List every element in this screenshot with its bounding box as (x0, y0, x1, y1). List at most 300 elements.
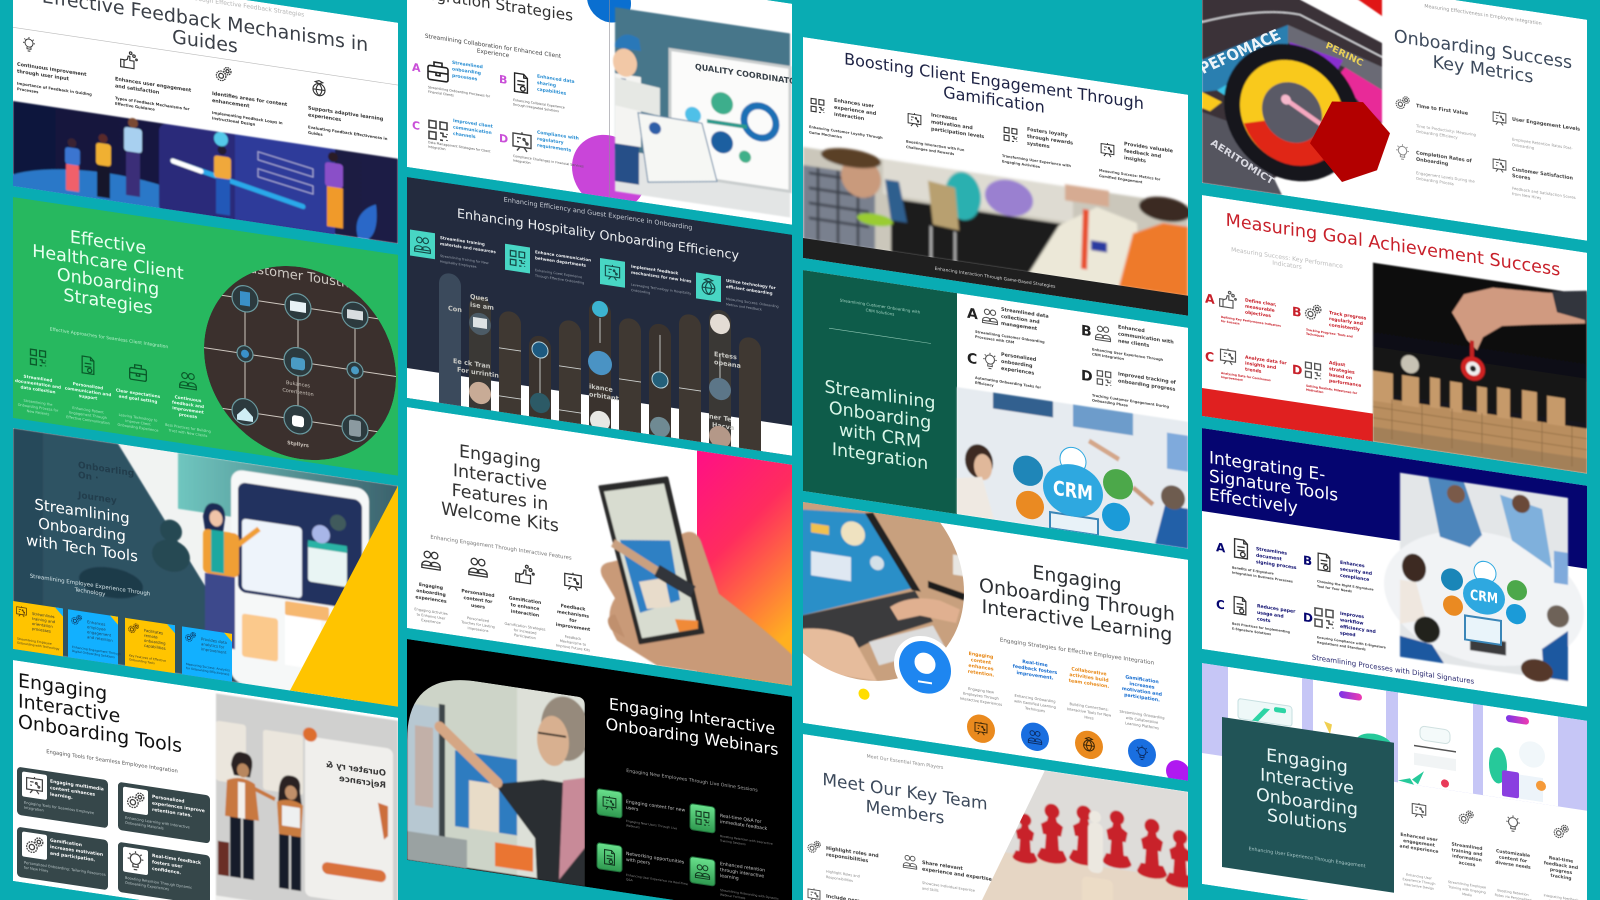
feature list: experiences (308, 112, 341, 123)
feature list: Engaging content for new (626, 799, 685, 814)
A B C D list: performance (1329, 378, 1361, 389)
feature cards: remote (144, 633, 158, 640)
feature list: insights (1124, 155, 1146, 164)
A B C D list: C (1205, 349, 1214, 365)
feature list: interaction (511, 609, 539, 619)
feature list: Streamline training (440, 235, 485, 247)
A B C D list: Improved client (453, 118, 494, 130)
feature list: Metrics and Feedback (726, 302, 762, 312)
strategy columns: Engaging (969, 651, 993, 661)
image: hand placing target on wooden blocks (1373, 259, 1587, 474)
feature cards: for Onboarding Effectiveness (186, 666, 230, 677)
A B C D list: C (1216, 597, 1225, 612)
strategy columns: Employees Through (963, 692, 999, 701)
feature list: Enhancing Customer Loyalty Through (809, 125, 883, 140)
feature list: Engagement Through (69, 410, 107, 420)
heading: Healthcare Client (32, 242, 184, 284)
A B C D list: Enhancing Collateral Experience (513, 98, 565, 110)
feature list: improvement (172, 405, 204, 415)
striped pillars: ner Te (709, 412, 732, 424)
A B C D list: Tracking Customer Engagement During (1092, 393, 1170, 409)
feature list: onboarding (416, 588, 446, 598)
feature list: Transforming User Experience with (1002, 154, 1071, 168)
A B C D list: A (1216, 540, 1226, 556)
feature cards: fosters user (152, 859, 183, 870)
feature cards: Onboarding Experiences (125, 881, 169, 891)
feature list: Enhancing User Experience via Real-Time (626, 873, 688, 886)
A B C D list: efficiency and (1340, 624, 1376, 635)
A B C D list: strategies (1329, 366, 1355, 376)
feature cards: Measuring Success: Analytics (186, 662, 230, 673)
strategy columns: Techniques (1024, 706, 1045, 713)
metrics list: Time to Productivity: Measuring (1415, 123, 1476, 137)
panel: Boosting Client Engagement Through Gamification (803, 37, 1191, 316)
A B C D list: Data Management Strategies for Client (428, 140, 491, 154)
heading: Engaging Interactive (609, 694, 775, 738)
slide subtitle: Streamlining Collaboration for Enhanced Client (425, 34, 562, 60)
strategy columns: content (971, 657, 992, 666)
feature list: feedback and (1124, 148, 1162, 160)
panel: Engaging Interactive Features in Welcome Kits (407, 407, 792, 686)
heading: Key Metrics (1433, 53, 1533, 88)
image: customer touch network (204, 266, 396, 460)
red footer bar (1202, 388, 1373, 442)
A B C D list: costs (1257, 616, 1271, 624)
image: team at table (803, 142, 1191, 297)
feature list: Types of Feedback Mechanisms for (115, 95, 190, 111)
feature list: users (471, 603, 485, 611)
feature cards: Enhancing Learning with Interactive (125, 816, 191, 830)
heading: Onboarding Through (979, 574, 1175, 626)
feature list (597, 788, 779, 900)
image: performance gauge (1196, 0, 1382, 210)
feature list: Increases (931, 112, 957, 122)
A B C D list: Processes with CRM (975, 335, 1015, 345)
heading: Interactive Learning (982, 595, 1172, 646)
A B C D list: Defining Key Performance Indicators (1221, 315, 1281, 328)
heading: Interactive (453, 461, 547, 495)
feature list: Experience Through (1403, 877, 1435, 886)
panel: Engaging Interactive Onboarding Tools (13, 660, 398, 900)
feature cards: employee (87, 624, 106, 632)
panel: Client Integration Strategies (407, 0, 803, 238)
strategy columns: Gamification (1125, 674, 1159, 685)
feature list: Personalized (73, 381, 103, 391)
feature cards: engagement (87, 629, 112, 638)
strategy columns: Building Connections: (1069, 702, 1109, 712)
A B C D list: Streamlining Onboarding Processes for (428, 85, 491, 99)
feature list: Measuring Success: Metrics for (1099, 168, 1161, 182)
background lettering: Onboarling (78, 461, 134, 479)
A B C D list: Track progress (1329, 310, 1367, 322)
A B C D list: Streamlining Customer Onboarding (975, 330, 1045, 344)
feature list: Real-time Q&A for (720, 813, 762, 825)
heading: Streamlining (34, 495, 130, 527)
A B C D list: security and (1340, 566, 1372, 577)
metrics list: Scores (1512, 173, 1530, 182)
feature list: tracking (1551, 873, 1571, 882)
feature cards: analytics for (201, 641, 225, 650)
A B C D list: through Integrated Solutions (513, 102, 559, 113)
A B C D list: Benefits of E-Signature (1232, 566, 1275, 576)
image: customer touch network: Stpllyrs (287, 440, 309, 449)
heading: Signature Tools (1209, 467, 1338, 506)
sidebar: with CRM (839, 420, 921, 453)
strategy columns: Learning Platforms (1125, 721, 1159, 730)
A B C D list: Define clear, (1245, 297, 1277, 308)
A B C D list: D (1292, 362, 1302, 378)
A B C D list: onboarding progress (1118, 378, 1176, 393)
strategy columns: Collaborative (1071, 666, 1107, 678)
A B C D list: Enhanced data (537, 74, 575, 85)
striped pillars: Con (448, 304, 462, 314)
image: customer touch network: Corerltenton (282, 387, 314, 398)
metrics list: Engagement Levels During the (1416, 170, 1475, 184)
feature cards: Engaging Tools for Seamless Employee (24, 801, 95, 815)
feature list: feedback and (172, 399, 204, 409)
heading: Strategies (63, 286, 153, 319)
feature list: Best Practices for Building (165, 423, 211, 434)
metrics list (1396, 95, 1580, 206)
feature cards: Real-time feedback (152, 853, 202, 866)
A B C D list: onboarding (452, 66, 481, 77)
feature list: Gamification Strategies (505, 622, 546, 632)
metrics list: Onboarding Process (1416, 176, 1454, 186)
feature cards: Enhancing Engagement Through (72, 645, 121, 656)
feature list: Boosting Retention with Interactive (720, 834, 773, 846)
illustration: team at dashboard (13, 100, 398, 244)
A B C D list: signing process (1256, 559, 1297, 571)
backdrop: screen mockups (1202, 663, 1587, 811)
sidebar (803, 270, 957, 514)
feature list: learning (720, 873, 739, 882)
feature cards: experiences improve (152, 800, 205, 814)
feature cards (17, 767, 210, 900)
feature list: Streamlining Training for New (440, 254, 489, 265)
mirrored screen lettering: Rejcrance (339, 774, 386, 791)
feature list: between departments (535, 255, 587, 268)
feature cards: Streamlining Employee (17, 637, 52, 646)
gradient block (697, 450, 792, 686)
strategy columns: increases (1129, 681, 1155, 691)
heading: Onboarding Webinars (606, 714, 778, 759)
feature cards: improvement (201, 646, 227, 655)
metrics list: Onboarding (1416, 157, 1449, 168)
feature list: Onboarding Process for (18, 403, 59, 413)
metrics list: User Engagement Levels (1512, 117, 1580, 133)
feature list: engagement (1403, 838, 1436, 849)
feature list: Implement feedback (631, 264, 679, 276)
A B C D list: trends (1245, 366, 1262, 375)
footer caption: Streamlining Processes with Digital Signatures (1312, 653, 1474, 686)
feature list: Through Effective Onboarding (534, 274, 584, 285)
feature list: Gamified Engagement (1099, 174, 1143, 184)
A B C D list: D (499, 132, 508, 146)
strategy columns: enhances (968, 663, 994, 673)
A B C D list: Streamlined data (1001, 307, 1049, 320)
strategy columns: Interactive Experiences (960, 697, 1002, 707)
A B C D list: Improvement (1221, 375, 1243, 382)
A B C D list: management (1001, 321, 1038, 332)
title card: Engaging (1266, 746, 1348, 778)
heading: Enhancing Hospitality Onboarding Efficiency (457, 207, 739, 264)
feature list: Mechanisms to (560, 639, 586, 647)
feature list: diverse needs (1495, 860, 1531, 871)
feature list: Importance of Feedback in Guiding (17, 81, 92, 97)
feature list: Utilize technology for (726, 278, 777, 290)
heading: Engaging (1032, 561, 1122, 597)
feature list: to enhance (511, 602, 539, 612)
feature list: mechanisms for new hires (631, 270, 692, 284)
feature cards: retention rates. (152, 807, 192, 819)
strategy columns: Engaging New (968, 687, 994, 695)
image: laptop e-learning (753, 454, 983, 709)
feature list: for Increased (514, 628, 536, 635)
A B C D list: measurable (1245, 303, 1275, 314)
title card: Onboarding (1256, 785, 1358, 820)
heading: Welcome Kits (441, 499, 559, 537)
feature list: immediate feedback (720, 819, 767, 832)
A B C D list: B (499, 73, 507, 87)
A B C D list: Analyzing Data for Continuous (1221, 371, 1271, 382)
feature list: Experience (421, 618, 441, 625)
feature list: data collection (20, 384, 56, 395)
striped pillars: opeana (714, 358, 741, 370)
heading: Guides (172, 25, 238, 58)
A B C D list: onboarding (1001, 359, 1033, 369)
background lettering: Journey (77, 491, 117, 507)
feature cards: Boosting Retention Through Dynamic (125, 876, 192, 890)
feature list: to Enhance User (417, 612, 446, 621)
decorative dot: purple (1166, 758, 1190, 786)
feature list: documentation and (15, 378, 61, 390)
heading: Gamification (943, 83, 1045, 117)
mirrored screen lettering: Ourater ry & (325, 760, 386, 779)
A B C D list: Techniques (1306, 332, 1324, 338)
feature list: Enhancing Patient (72, 406, 104, 415)
image: tech tools illustration (13, 428, 398, 707)
panel: Meet Our Key Team Members (803, 734, 1194, 900)
feature list: progress (1550, 867, 1572, 876)
strategy columns: activities build (1069, 672, 1109, 684)
feature cards: for New Hires (24, 866, 48, 873)
feature cards: Provides data (201, 636, 227, 645)
A B C D list: Enhances (1340, 560, 1365, 569)
A B C D list: experiences (1001, 366, 1034, 377)
feature list: Implementing Feedback Loops in (212, 110, 283, 125)
A B C D list (412, 60, 584, 168)
header band (1202, 428, 1587, 569)
feature list: Effective Communication (66, 415, 110, 426)
slide subtitle: Experience (477, 48, 510, 59)
panel: Measuring Goal Achievement Success (1202, 195, 1587, 474)
strategy columns: motivation and (1122, 686, 1162, 698)
A B C D list: objectives (1245, 309, 1271, 319)
A B C D list: B (1081, 323, 1092, 340)
A B C D list: Improved tracking of (1118, 371, 1177, 386)
feature cards: Integration (24, 806, 44, 813)
feature list: Streamlining Employee (1448, 880, 1486, 890)
feature list: Engaging Activities (1002, 159, 1040, 169)
feature cards: Enhances (87, 619, 105, 627)
image: two colleagues with onboarding screen (216, 693, 398, 900)
image: customer touch network: Bukances (286, 380, 310, 390)
strategy columns: participation. (1124, 692, 1160, 704)
sidebar: Onboarding (829, 398, 931, 434)
A B C D list: Compliance Challenges in Financial Services (513, 154, 584, 169)
feature cards: content enhances (50, 785, 95, 798)
striped pillars: For urrintin (457, 366, 499, 380)
A B C D list: document (1256, 553, 1283, 563)
feature list: Engaging (419, 582, 443, 591)
feature list: Participation (514, 633, 536, 640)
feature cards: increases motivation (50, 844, 103, 858)
feature list: and goal setting (119, 393, 157, 404)
feature list: Enhancing Guest Experience (535, 268, 582, 279)
A B C D list: A (967, 306, 978, 323)
image: presenter at screen (407, 669, 589, 887)
feature list: Continuous (175, 394, 202, 403)
feature cards: Onboarding Materials (125, 821, 164, 831)
feature list: Identifies areas for content (212, 91, 288, 108)
feature list: for (569, 617, 577, 625)
feature list: Webinars (626, 823, 640, 829)
A B C D list: Onboarding Phase (1092, 398, 1129, 408)
A B C D list: Ensuring Compliance with E-Signature (1317, 635, 1387, 650)
striped pillars: Hacva (712, 421, 734, 432)
feature list: process (179, 412, 198, 419)
A B C D list: Financial Clients (428, 90, 454, 98)
A B C D list: Efficiency (975, 381, 994, 388)
title card: Enhancing User Experience Through Engagement (1249, 846, 1366, 870)
feature cards: Facilitates (144, 628, 163, 635)
sidebar: Streamlining Customer Onboarding with (840, 298, 921, 315)
heading: Onboarding Tools (18, 710, 182, 757)
slide subtitle: Measuring Effectiveness in Employee Integration (1424, 3, 1542, 27)
A B C D list: D (1303, 610, 1313, 626)
feature list: users (626, 805, 639, 813)
feature list: motivation and (931, 119, 973, 132)
feature list: access (1459, 861, 1476, 868)
feature list: Game Mechanics (809, 130, 842, 139)
feature list (809, 94, 1174, 189)
striped pillars: ise am (470, 300, 494, 312)
feature list: Onboarding Experience (118, 423, 158, 433)
metrics list: Onboarding (1512, 142, 1535, 150)
feature list: Clear expectations (116, 387, 161, 399)
feature cards (13, 601, 232, 682)
striped pillars: ikance (589, 382, 613, 394)
feature list: Streamlined (24, 374, 52, 383)
A B C D list: Integration (428, 145, 446, 151)
feature list (1400, 798, 1578, 900)
strategy columns (960, 650, 1164, 770)
feature list: Streamlined (1452, 841, 1482, 852)
A B C D list: Integration in Business Processes (1232, 571, 1293, 584)
A B C D list: regulatory (537, 136, 564, 146)
A B C D list: C (412, 119, 420, 133)
feature list: experience and (834, 105, 877, 117)
feature list: Training Sessions (719, 838, 746, 846)
metrics list: Time to First Value (1416, 103, 1469, 117)
A B C D list: Reduces paper (1257, 603, 1296, 615)
striped pillars: Ques (470, 292, 488, 303)
heading: Onboarding Success (1394, 27, 1572, 73)
feature list: Engaging Activities (414, 607, 448, 616)
feature cards: onboarding (144, 638, 166, 646)
A B C D list: Enhanced (1118, 324, 1145, 334)
feature list: through interactive (720, 867, 764, 880)
feature list: Training with Engaging (1447, 885, 1486, 895)
image: red pawns and leader figure (943, 755, 1194, 900)
feature cards: training and (32, 616, 56, 624)
feature list: Instructional Design (212, 115, 256, 127)
A B C D list: Integration (513, 158, 531, 165)
heading: Interactive (18, 689, 120, 728)
feature cards: Gamification (50, 838, 82, 848)
strategy columns: Streamlining Onboarding (1120, 709, 1164, 720)
feature list: Enhanced user (1400, 832, 1438, 843)
title card: Interactive (1260, 765, 1354, 799)
feature list: and satisfaction (115, 83, 160, 96)
sidebar: CRM Solutions (866, 307, 894, 317)
feature list: mechanisms (557, 609, 589, 620)
feature cards: Streamlines (32, 611, 55, 619)
feature list: Enhanced retention (720, 861, 765, 874)
strategy columns: retention. (968, 669, 994, 679)
A B C D list: D (1081, 368, 1093, 385)
A B C D list: collection and (1001, 314, 1040, 326)
A B C D list: Enhancing User Experience Through (1092, 347, 1164, 362)
A B C D list (1216, 536, 1387, 655)
striped pillars: Ee ck Tran (453, 357, 491, 371)
feature list: improvement (556, 622, 591, 633)
feature list: Personalized (467, 616, 489, 623)
feature list: Challenges and Rewards (906, 145, 954, 156)
feature list: Enhancing User (1406, 873, 1432, 881)
A B C D list: new clients (1118, 338, 1149, 349)
slide subtitle: Measuring Success: Key Performance (1231, 246, 1343, 270)
A B C D list (967, 302, 1177, 415)
feature cards: and retention (87, 634, 113, 643)
feature cards: learning. (50, 792, 73, 801)
A B C D list: processes (452, 73, 478, 83)
title card (1222, 717, 1394, 893)
heading: Engaging (459, 442, 541, 474)
feature list: Fosters loyalty (1027, 127, 1069, 139)
image: quality coordinator with certificate (613, 7, 803, 219)
feature list: through rewards (1027, 134, 1073, 147)
heading: Members (866, 797, 944, 829)
feature list: enhancement (212, 98, 250, 110)
A B C D list: B (1292, 304, 1302, 320)
feature list: Supports adaptive learning (308, 105, 384, 123)
slide subtitle: Engaging New Employees Through Live Online Sessions (626, 768, 758, 794)
panel: Engaging Interactive Onboarding Webinars (407, 639, 792, 900)
caption: Enhancing Interaction Through Game-Based Strategies (935, 266, 1056, 290)
strategy columns: with Collaborative (1126, 716, 1159, 725)
feature list: feedback and (1544, 860, 1578, 871)
feature list: Touches for Lasting (460, 620, 495, 629)
feature list: communication and (65, 385, 111, 397)
feature list: Feedback (561, 603, 586, 613)
slide subtitle: Enhancing Efficiency and Guest Experience in Onboarding (504, 196, 692, 232)
feature list: systems (1027, 141, 1050, 150)
feature list: Hospitality Employees (440, 259, 477, 269)
A B C D list: C (967, 351, 977, 368)
A B C D list: Tracking Progress: Tools and (1306, 328, 1353, 339)
heading: with Tech Tools (26, 531, 138, 566)
